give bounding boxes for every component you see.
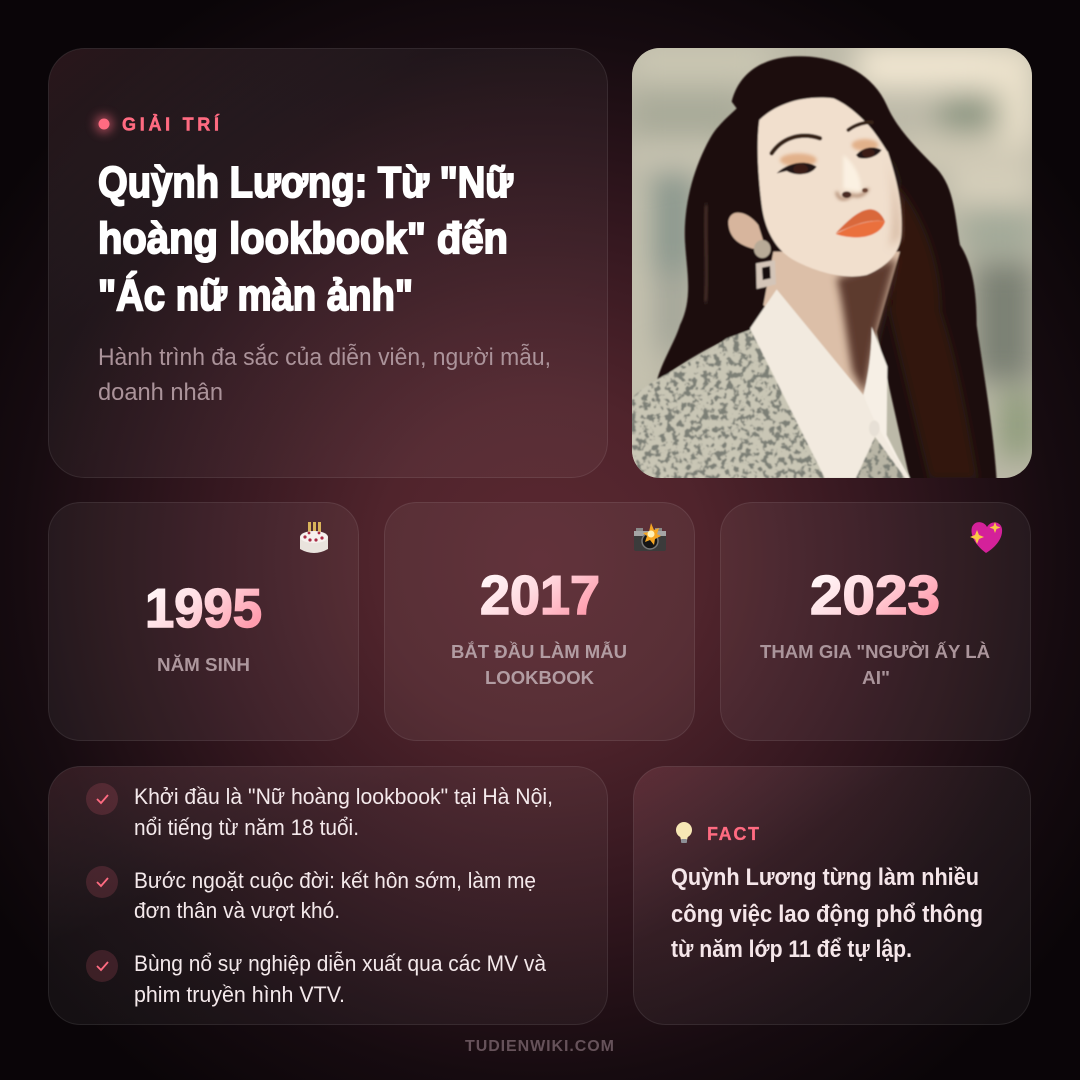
- eyes: [777, 147, 882, 174]
- label: [451, 641, 627, 688]
- ear: [728, 213, 767, 252]
- point 2: Bước ngoặt cuộc đời: kết hôn sớm, làm mẹ: [134, 868, 536, 893]
- photo background: [630, 45, 1035, 480]
- label: LOOKBOOK: [485, 668, 594, 688]
- point 2: đơn thân và vượt khó.: [134, 898, 340, 923]
- eye makeup: [780, 139, 878, 167]
- shirt pattern and button: [855, 420, 907, 480]
- neck: [763, 252, 900, 395]
- fact text: từ năm lớp 11 để tự lập.: [671, 936, 912, 963]
- label: BẮT ĐẦU LÀM MẪU: [451, 641, 627, 662]
- category tag: GIẢI TRÍ: [122, 114, 220, 134]
- label: [760, 641, 990, 688]
- portrait photo: [630, 45, 1035, 480]
- point 1: [86, 783, 553, 840]
- icon: light bulb: [676, 822, 692, 843]
- heading: hoàng lookbook" đến: [98, 214, 508, 263]
- heading: Quỳnh Lương: Từ "Nữ: [98, 158, 513, 207]
- subtitle: doanh nhân: [98, 379, 223, 406]
- subject: [630, 56, 997, 480]
- panel: title card: [48, 48, 608, 478]
- panel: key points: [48, 766, 608, 1024]
- icon: camera with flash: [634, 523, 666, 551]
- subtitle: Hành trình đa sắc của diễn viên, người mẫu,: [98, 344, 551, 371]
- fact text: Quỳnh Lương từng làm nhiều: [671, 864, 979, 891]
- eyebrows: [772, 122, 872, 153]
- footer source: TUDIENWIKI.COM: [465, 1038, 614, 1055]
- hair: [657, 56, 997, 480]
- face: [758, 98, 902, 276]
- icon: birthday cake: [300, 522, 328, 553]
- point 2: [86, 866, 536, 923]
- heading: "Ác nữ màn ảnh": [98, 270, 413, 320]
- point 3: [86, 950, 547, 1007]
- point 1: nổi tiếng từ năm 18 tuổi.: [134, 815, 359, 840]
- icon: sparkling heart: [970, 522, 1002, 553]
- heading: [98, 158, 513, 320]
- label: NĂM SINH: [157, 654, 250, 675]
- year: 1995: [145, 577, 262, 639]
- point 3: phim truyền hình VTV.: [134, 982, 345, 1007]
- lips: [836, 209, 885, 237]
- earring: [754, 240, 776, 289]
- panel: fact: [634, 766, 1030, 1024]
- jacket: [630, 330, 830, 480]
- panel: stat 2023: [720, 502, 1030, 740]
- panel: stat 1995: [48, 502, 358, 740]
- nose: [837, 188, 868, 199]
- subtitle: [98, 344, 551, 406]
- year: 2017: [480, 564, 600, 626]
- fact text: [671, 864, 983, 963]
- fact label: FACT: [707, 824, 759, 844]
- point 3: Bùng nổ sự nghiệp diễn xuất qua các MV và: [134, 951, 547, 976]
- panel: stat 2017: [384, 502, 694, 740]
- year: 2023: [810, 564, 940, 626]
- point 1: Khởi đầu là "Nữ hoàng lookbook" tại Hà Nội,: [134, 784, 553, 809]
- label: AI": [862, 668, 890, 688]
- white collar: [750, 289, 910, 478]
- fact text: công việc lao động phổ thông: [671, 901, 983, 928]
- label: THAM GIA "NGƯỜI ẤY LÀ: [760, 641, 990, 662]
